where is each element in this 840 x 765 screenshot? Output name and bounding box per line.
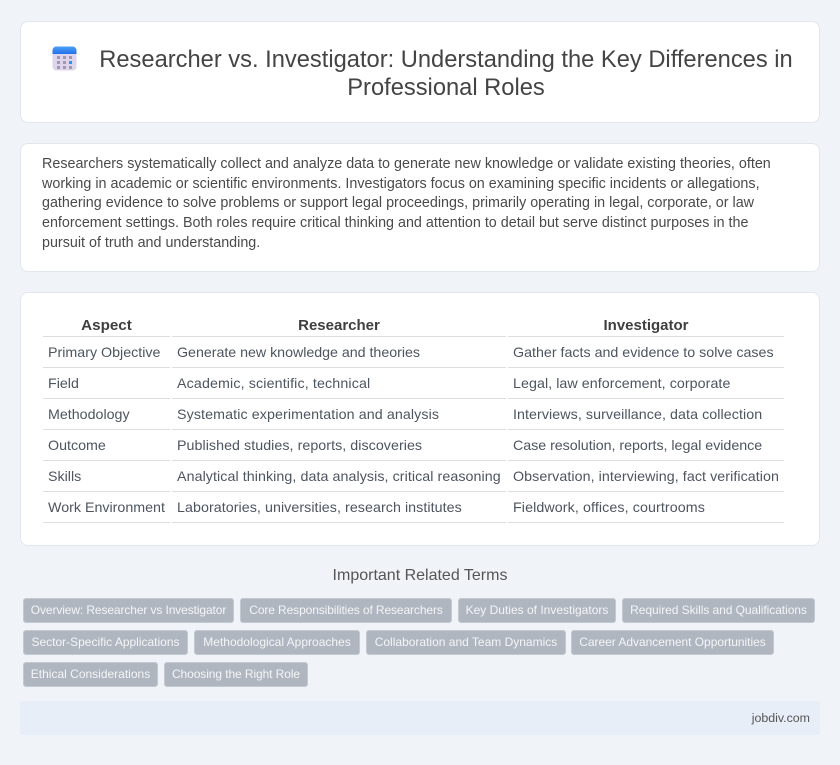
text: Interviews, surveillance, data collection [513,407,762,423]
text: Gather facts and evidence to solve cases [513,345,774,361]
intro paragraph: pursuit of truth and understanding. [42,235,260,251]
text: Outcome [48,438,106,454]
text: Work Environment [48,500,165,516]
comparison table [43,317,784,337]
intro paragraph: Researchers systematically collect and analyze data to generate new knowledge or validate existing theories, often [42,156,771,172]
text: Laboratories, universities, research institutes [177,500,462,516]
related terms tags: Overview: Researcher vs Investigator [31,603,226,617]
text: Systematic experimentation and analysis [177,407,439,423]
related terms tags: Required Skills and Qualifications [630,603,807,617]
title: Professional Roles [347,75,545,101]
header card [20,21,820,123]
comparison table: Investigator [603,317,689,334]
intro paragraph [42,156,771,251]
comparison table panel [20,292,820,546]
comparison table: Researcher [298,317,380,334]
text: Field [48,376,79,392]
footer source: jobdiv.com [752,711,810,725]
text: Primary Objective [48,345,160,361]
intro panel [20,143,820,272]
intro paragraph: working in academic or scientific environments. Investigators focus on examining specific incidents or allegations, [42,176,760,192]
text: Generate new knowledge and theories [177,345,420,361]
text: Methodology [48,407,130,423]
text: Academic, scientific, technical [177,376,370,392]
related terms tags: Collaboration and Team Dynamics [375,635,557,649]
related terms tags: Key Duties of Investigators [466,603,608,617]
related terms tags: Sector-Specific Applications [31,635,180,649]
text: Fieldwork, offices, courtrooms [513,500,705,516]
text: Skills [48,469,81,485]
text: Published studies, reports, discoveries [177,438,422,454]
related terms tags: Ethical Considerations [31,667,150,681]
intro paragraph: gathering evidence to solve problems or support legal proceedings, primarily operating in legal, corporate, or law [42,195,754,211]
intro paragraph: enforcement settings. Both roles require critical thinking and attention to detail but serve distinct purposes in the [42,215,748,231]
footer bar [20,701,820,735]
related terms tags: Choosing the Right Role [172,667,300,681]
title [99,47,793,101]
text: Legal, law enforcement, corporate [513,376,730,392]
text: Case resolution, reports, legal evidence [513,438,762,454]
comparison table: Aspect [81,317,132,334]
related terms tags [23,598,815,687]
related terms tags: Methodological Approaches [203,635,351,649]
related terms heading: Important Related Terms [333,567,507,584]
text: Observation, interviewing, fact verification [513,469,779,485]
text: Analytical thinking, data analysis, critical reasoning [177,469,501,485]
title: Researcher vs. Investigator: Understanding the Key Differences in [99,47,793,73]
related terms tags: Core Responsibilities of Researchers [249,603,443,617]
related terms tags: Career Advancement Opportunities [579,635,766,649]
icon: calendar [52,46,76,70]
